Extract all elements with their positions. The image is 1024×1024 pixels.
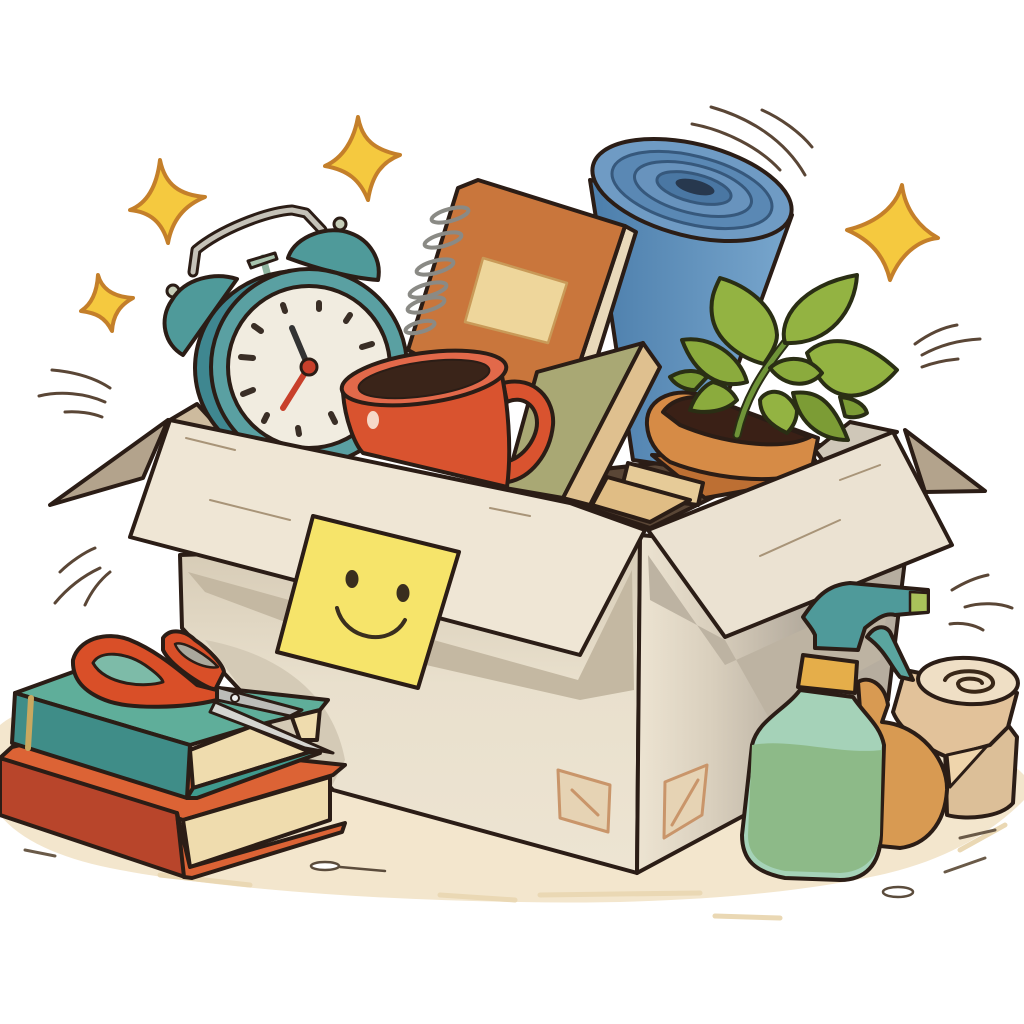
ground patch	[0, 706, 1024, 918]
left flap	[130, 420, 645, 655]
box right face	[637, 535, 905, 873]
box stamp left	[558, 770, 610, 832]
folder and kraft packets	[505, 343, 703, 522]
box stamp right	[664, 765, 707, 838]
motion lines	[39, 107, 1012, 630]
brown sack	[858, 680, 947, 848]
yoga mat	[582, 121, 802, 470]
box scuffs	[186, 438, 880, 556]
right face flap shadow	[648, 555, 890, 720]
open cardboard box	[130, 420, 952, 873]
sticky note	[277, 516, 459, 688]
right flap	[648, 432, 952, 637]
alarm clock	[165, 210, 407, 465]
spray bottle	[742, 583, 928, 880]
book shadow on box	[205, 640, 345, 790]
plant leaves	[670, 275, 897, 440]
stack of books	[0, 672, 345, 878]
left face flap shadow	[188, 570, 634, 700]
paper rolls	[893, 655, 1019, 817]
plant pot	[647, 393, 818, 498]
box front-left face	[180, 540, 640, 873]
notebook	[404, 180, 636, 400]
teal book	[12, 672, 328, 798]
sparkles	[81, 117, 938, 331]
scissors	[73, 631, 333, 753]
red mug	[338, 342, 553, 487]
box back flaps and interior	[50, 404, 985, 528]
red book	[0, 735, 345, 878]
